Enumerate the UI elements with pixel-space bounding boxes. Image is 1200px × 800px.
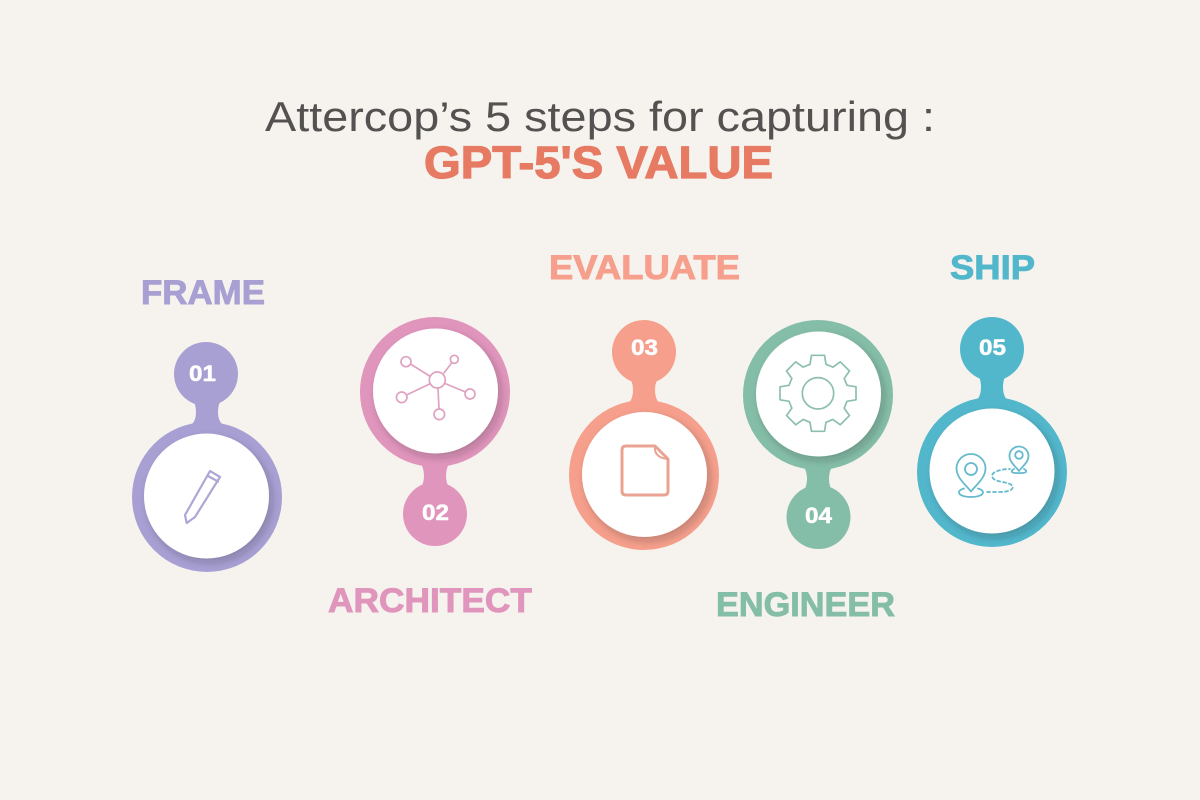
- white disc 04: [756, 332, 881, 456]
- white disc 02: [373, 328, 498, 454]
- step 05: ship: [917, 249, 1067, 547]
- number 02: 02: [422, 500, 449, 525]
- white disc 05: [930, 408, 1054, 534]
- heading: engineer: ENGINEER: [716, 586, 895, 624]
- heading: evaluate: EVALUATE: [549, 249, 740, 287]
- step 02: architect: [328, 317, 532, 620]
- icon: route map: [956, 446, 1028, 497]
- white disc 01: [144, 434, 269, 558]
- white disc 03: [582, 412, 707, 537]
- heading: frame: FRAME: [141, 274, 265, 312]
- badge shape 04: [743, 320, 893, 549]
- icon: pencil: [185, 471, 220, 523]
- number 01: 01: [189, 361, 216, 386]
- badge shape 01: [132, 342, 282, 572]
- badge shape 03: [569, 320, 719, 550]
- number 03: 03: [631, 335, 658, 360]
- number 05: 05: [979, 335, 1006, 360]
- badge shape 05: [917, 317, 1067, 547]
- title line 1: Attercop’s 5 steps for capturing :: [265, 93, 935, 140]
- title: [265, 93, 935, 188]
- badge shape 02: [360, 317, 510, 546]
- title line 2: GPT-5'S VALUE: [424, 137, 773, 188]
- step 04: engineer: [716, 320, 895, 624]
- heading: architect: ARCHITECT: [328, 582, 532, 620]
- step 03: evaluate: [549, 249, 740, 550]
- number 04: 04: [805, 503, 833, 528]
- icon: network: [396, 355, 475, 420]
- heading: ship: SHIP: [950, 249, 1035, 287]
- icon: gear: [780, 355, 856, 431]
- step 01: frame: [132, 274, 282, 572]
- icon: document: [622, 446, 668, 495]
